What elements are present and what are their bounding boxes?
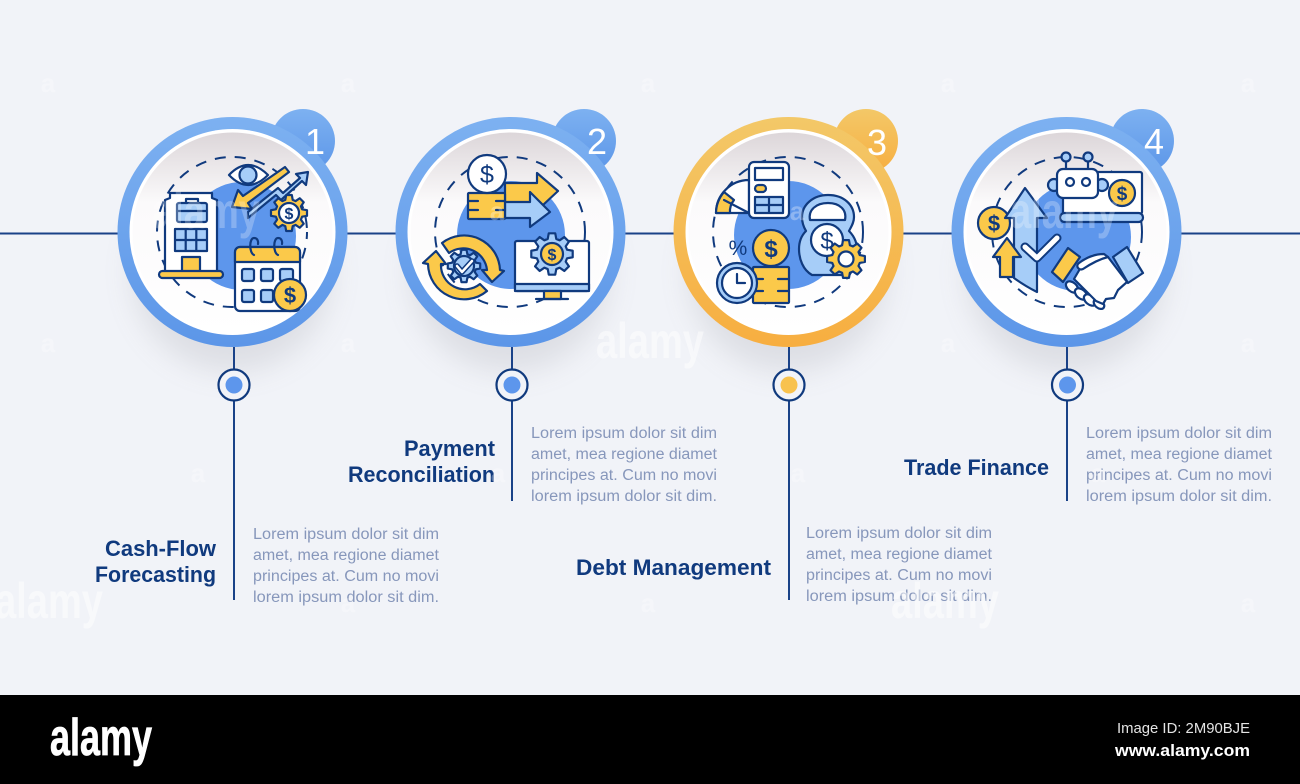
drop shadow 3 — [688, 172, 888, 372]
footer image id: Image ID: 2M90BJE — [1117, 720, 1250, 737]
heading 3: Debt Management — [576, 555, 772, 580]
watermarks: a — [341, 68, 356, 98]
watermarks: a — [341, 588, 356, 618]
watermarks: alamy — [596, 313, 704, 369]
watermarks: a — [1241, 68, 1256, 98]
watermarks: a — [641, 68, 656, 98]
footer bar — [0, 695, 1300, 784]
watermarks: a — [491, 458, 506, 488]
ring 1 — [118, 117, 348, 347]
number 2: 2 — [587, 121, 607, 162]
watermarks: a — [191, 458, 206, 488]
footer logo: alamy — [50, 709, 152, 767]
text block 4: amet, mea regione diamet — [1086, 446, 1273, 463]
icon: robot, payment card, growth arrows and handshake: $ — [988, 211, 1000, 236]
heading 2 — [348, 436, 496, 487]
watermarks: a — [41, 328, 56, 358]
number 3: 3 — [867, 122, 887, 163]
watermarks: a — [790, 196, 805, 226]
text block 3: lorem ipsum dolor sit dim. — [806, 588, 992, 605]
text block 1: amet, mea regione diamet — [253, 547, 440, 564]
heading 2: Reconciliation — [348, 462, 495, 487]
icon: gauge, calculator, kettlebell, coins and clock: $ — [820, 228, 834, 255]
panel: step 4 trade finance — [904, 109, 1273, 505]
watermarks: alamy — [152, 183, 260, 239]
heading 2: Payment — [404, 436, 496, 461]
text block 4 — [1086, 425, 1273, 505]
text block 4: principes at. Cum no movi — [1086, 467, 1272, 484]
text block 4: Lorem ipsum dolor sit dim — [1086, 425, 1272, 442]
panel: step 2 payment reconciliation — [348, 109, 718, 505]
panel: step 1 cash-flow forecasting — [95, 109, 440, 606]
number badge 4 — [1110, 109, 1174, 173]
text block 1: Lorem ipsum dolor sit dim — [253, 526, 439, 543]
heading 1: Forecasting — [95, 562, 216, 587]
watermarks: a — [791, 458, 806, 488]
footer url: www.alamy.com — [1114, 741, 1250, 760]
text block 2: lorem ipsum dolor sit dim. — [531, 488, 717, 505]
watermarks: a — [941, 328, 956, 358]
ring 2 — [396, 117, 626, 347]
icon: gauge, calculator, kettlebell, coins and clock — [713, 157, 865, 307]
number 4: 4 — [1144, 121, 1164, 162]
watermarks: a — [41, 68, 56, 98]
icon: coins, transfer arrows, sync gear and monitor: $ — [548, 247, 557, 264]
text block 2: amet, mea regione diamet — [531, 446, 718, 463]
drop shadow 1 — [132, 172, 332, 372]
ring 4 — [952, 117, 1182, 347]
icon: coins, transfer arrows, sync gear and monitor: $ — [480, 161, 494, 189]
watermarks: a — [941, 68, 956, 98]
text block 4: lorem ipsum dolor sit dim. — [1086, 488, 1272, 505]
icon: building, eye, growth arrows, gear and calendar: $ — [284, 283, 296, 308]
number 1: 1 — [305, 121, 325, 162]
heading 1 — [95, 536, 217, 587]
text block 1: principes at. Cum no movi — [253, 568, 439, 585]
watermarks — [0, 68, 1256, 629]
number badge 2 — [552, 109, 616, 173]
text block 3: amet, mea regione diamet — [806, 546, 993, 563]
icon: building, eye, growth arrows, gear and calendar — [157, 157, 308, 311]
watermarks: a — [641, 588, 656, 618]
connector 1 — [218, 347, 250, 600]
text block 2: principes at. Cum no movi — [531, 467, 717, 484]
watermarks: a — [490, 196, 505, 226]
watermarks: a — [1091, 458, 1106, 488]
ring 3 — [674, 117, 904, 347]
icon: gauge, calculator, kettlebell, coins and clock: $ — [764, 236, 778, 263]
drop shadow 2 — [410, 172, 610, 372]
panel: step 3 debt management — [576, 109, 993, 605]
connector 4 — [1052, 347, 1083, 501]
number badge 3 — [834, 109, 898, 173]
text block 3: Lorem ipsum dolor sit dim — [806, 525, 992, 542]
text block 3: principes at. Cum no movi — [806, 567, 992, 584]
icon: robot, payment card, growth arrows and handshake: $ — [1117, 184, 1128, 205]
watermarks: a — [1241, 328, 1256, 358]
text block 2 — [531, 425, 718, 505]
timeline axis — [0, 232, 1300, 234]
watermarks: a — [1241, 588, 1256, 618]
heading 1: Cash-Flow — [105, 536, 217, 561]
text block 2: Lorem ipsum dolor sit dim — [531, 425, 717, 442]
text block 1 — [253, 526, 440, 606]
connector 2 — [496, 347, 528, 501]
number badge 1 — [271, 109, 335, 173]
text block 1: lorem ipsum dolor sit dim. — [253, 589, 439, 606]
icon: gauge, calculator, kettlebell, coins and clock: % — [729, 237, 747, 260]
watermarks: a — [341, 328, 356, 358]
icon: building, eye, growth arrows, gear and calendar: $ — [285, 206, 294, 223]
icon: robot, payment card, growth arrows and handshake — [978, 152, 1143, 311]
drop shadow 4 — [966, 172, 1166, 372]
watermarks: alamy — [1010, 183, 1118, 239]
text block 3 — [806, 525, 993, 605]
heading 4: Trade Finance — [904, 455, 1049, 480]
icon: coins, transfer arrows, sync gear and monitor — [423, 155, 589, 307]
watermarks: alamy — [891, 573, 999, 629]
connector 3 — [774, 347, 804, 600]
